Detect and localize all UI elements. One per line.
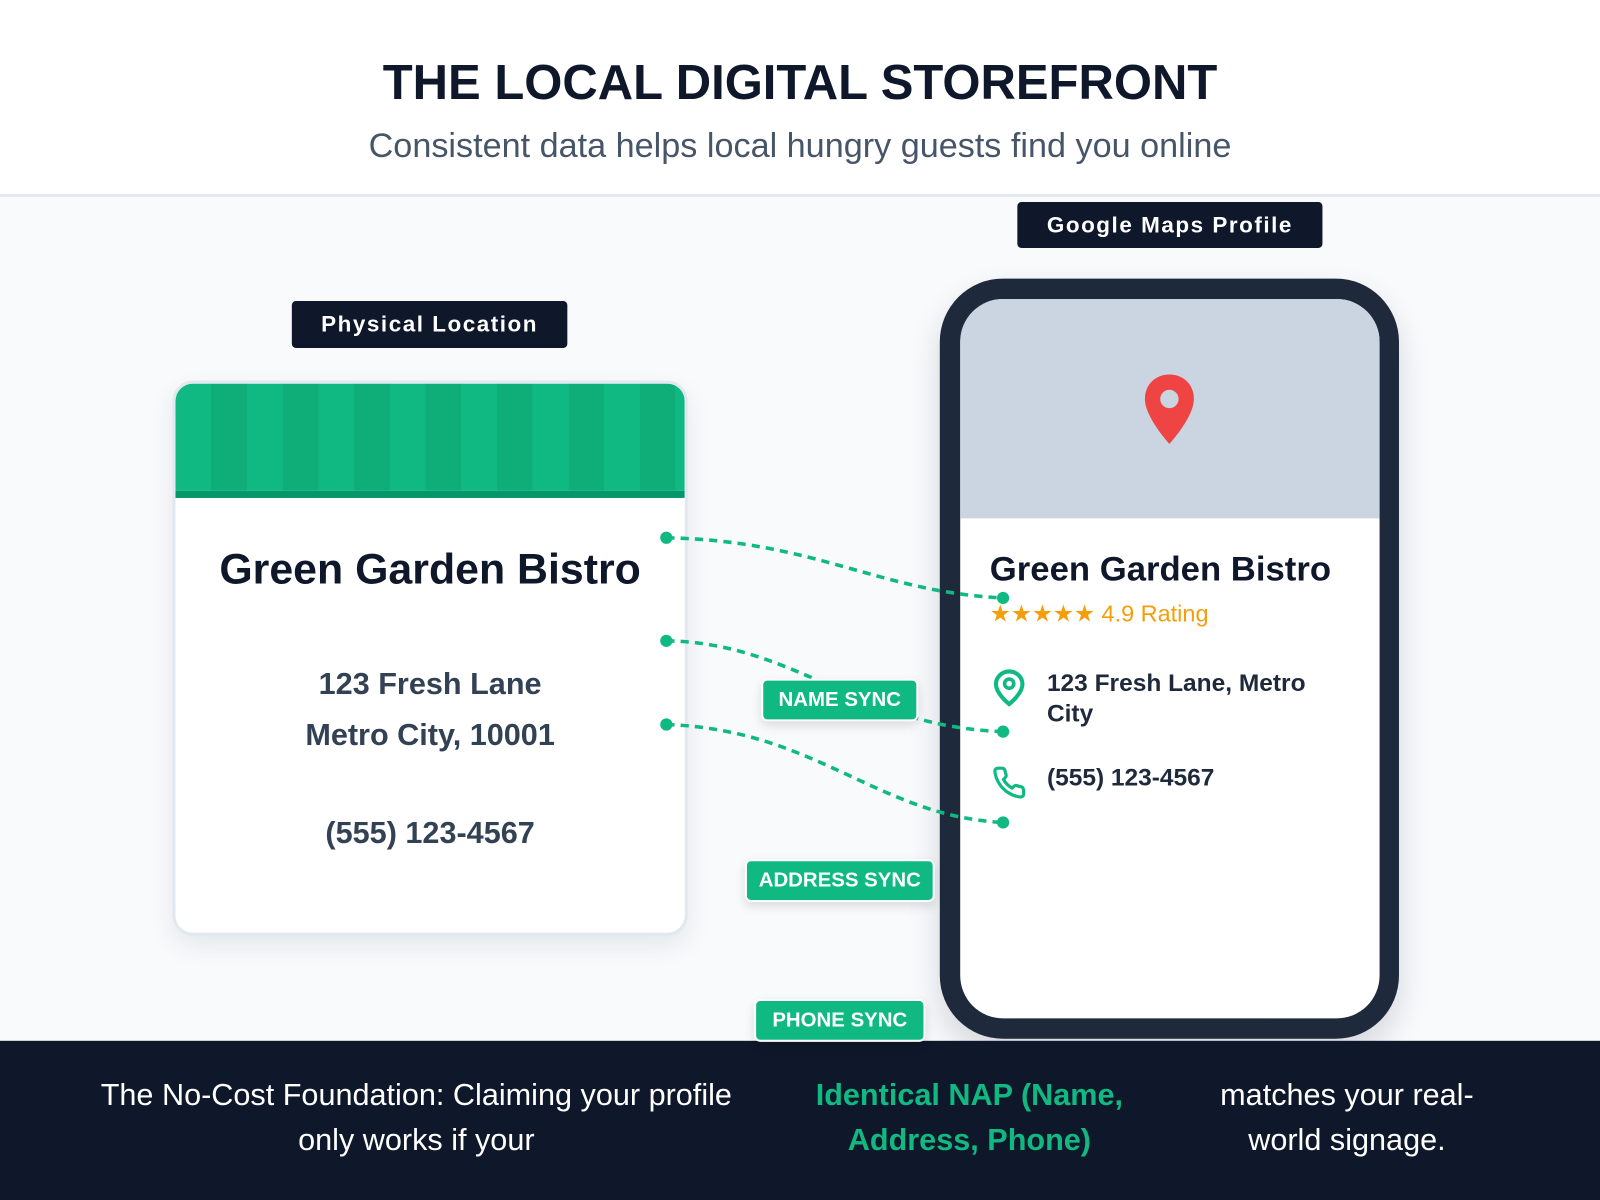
card phone: (555) 123-4567 — [325, 816, 535, 850]
phone screen — [960, 299, 1380, 1018]
footer text right: matches your real-world signage. — [1220, 1079, 1474, 1157]
card address: 123 Fresh Lane — [319, 667, 542, 701]
subtitle: Consistent data helps local hungry guests find you online — [369, 128, 1231, 165]
rating: ★★★★★ 4.9 Rating — [990, 600, 1209, 627]
phone mockup — [940, 279, 1399, 1039]
footer — [0, 1041, 1600, 1200]
name sync badge — [761, 679, 918, 721]
phone sync badge — [754, 999, 926, 1042]
card address: Metro City, 10001 — [305, 718, 555, 752]
profile address: 123 Fresh Lane, Metro City — [1047, 669, 1306, 728]
awning — [176, 384, 685, 498]
title: THE LOCAL DIGITAL STOREFRONT — [383, 56, 1217, 110]
name sync badge: NAME SYNC — [779, 688, 901, 711]
map area — [960, 299, 1380, 518]
footer highlight: Identical NAP (Name, Address, Phone) — [816, 1079, 1123, 1157]
profile name: Green Garden Bistro — [990, 550, 1331, 589]
address sync badge — [745, 859, 935, 902]
footer text left: The No-Cost Foundation: Claiming your profile only works if your — [101, 1079, 732, 1157]
icon: phone — [993, 766, 1026, 799]
address sync badge: ADDRESS SYNC — [759, 869, 921, 891]
badge: physical location: Physical Location — [321, 311, 538, 337]
card address — [305, 667, 555, 752]
panel: physical storefront card — [172, 381, 688, 936]
badge: google maps profile — [1017, 202, 1322, 248]
icon: location — [994, 669, 1024, 707]
header — [0, 0, 1600, 197]
phone sync badge: PHONE SYNC — [772, 1009, 907, 1031]
profile phone: (555) 123-4567 — [1047, 764, 1214, 792]
badge: google maps profile: Google Maps Profile — [1047, 212, 1293, 237]
icon: map pin — [1144, 374, 1194, 444]
card name: Green Garden Bistro — [219, 545, 641, 593]
badge: physical location — [292, 301, 567, 348]
